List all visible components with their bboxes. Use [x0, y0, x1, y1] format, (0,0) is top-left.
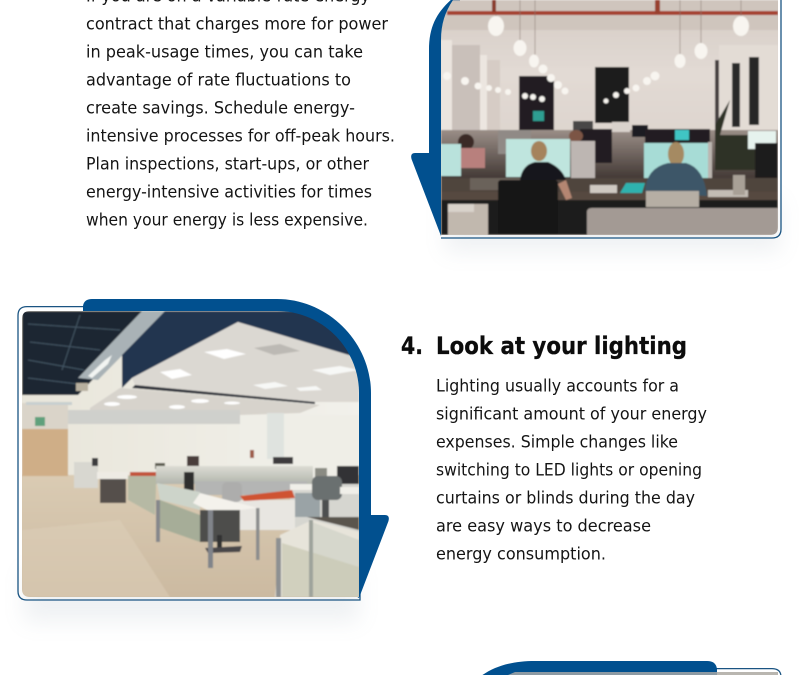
- body text: variable-rate energy contract: [86, 0, 395, 230]
- hanging bulbs: [496, 0, 741, 56]
- desk surface: [441, 176, 778, 194]
- photo: bright open office with ceiling lights and cubicles: [20, 305, 365, 600]
- photo frame outline: [441, 0, 781, 238]
- section 3: text block with office photo: [86, 0, 781, 252]
- floor: [20, 475, 365, 600]
- body text: lighting advice: energy consumption.: [436, 544, 606, 564]
- section 5: top of next photo, cut off at page bottom: [481, 661, 781, 675]
- photo sliver: [505, 672, 778, 675]
- exposed dark ceiling: [22, 311, 142, 396]
- body text: lighting advice: curtains or blinds during the day: [436, 488, 695, 508]
- body text: lighting advice: switching to LED lights or opening: [436, 460, 702, 480]
- foreground desk: [307, 517, 359, 530]
- photo shadow: [445, 200, 780, 252]
- main glass panel and desk: [157, 483, 200, 510]
- foreground partition: [587, 208, 778, 235]
- windows: [519, 76, 554, 130]
- glass partition wall: [156, 466, 313, 484]
- upper wall band: [68, 410, 240, 424]
- body text: variable-rate energy contract: advantage of rate fluctuations to: [86, 70, 351, 90]
- body text: lighting advice: expenses. Simple changes like: [436, 432, 678, 452]
- far cubicles: [74, 462, 98, 488]
- drawers: [448, 204, 488, 235]
- monitors: [441, 144, 461, 176]
- silver duct: [78, 311, 166, 380]
- body text: variable-rate energy contract: when your energy is less expensive.: [86, 210, 368, 230]
- body text: variable-rate energy contract: intensive processes for off-peak hours.: [86, 126, 395, 146]
- photo frame outline: [715, 669, 781, 675]
- wood door: [22, 428, 68, 476]
- lower ceiling tier: [90, 388, 320, 415]
- photo: open-plan office at night with pendant bulbs: [436, 0, 781, 240]
- body text: lighting advice: significant amount of your energy: [436, 404, 707, 424]
- body text: lighting advice: Lighting usually accounts for a: [436, 376, 679, 396]
- orange seat cushion: [240, 490, 295, 501]
- woman at desk: [531, 141, 547, 161]
- white ceiling panel: [132, 322, 359, 402]
- man at desk: [668, 142, 684, 166]
- blue arrow-shaped band: [481, 661, 717, 675]
- left person: [458, 134, 474, 150]
- blue arrow-shaped band: [83, 299, 389, 598]
- body text: variable-rate energy contract: in peak-usage times, you can take: [86, 42, 363, 62]
- chair back: [222, 494, 242, 502]
- red beams: [447, 11, 778, 15]
- white drawers: [227, 500, 295, 530]
- chair: [498, 178, 558, 202]
- number 4: 4.: [401, 332, 423, 360]
- body text: lighting advice: [436, 376, 707, 564]
- body text: variable-rate energy contract: create savings. Schedule energy-: [86, 98, 355, 118]
- body text: variable-rate energy contract: Plan inspections, start-ups, or other: [86, 154, 369, 174]
- heading: look at your lighting: Look at your lighting: [436, 332, 687, 360]
- body text: lighting advice: are easy ways to decrease: [436, 516, 651, 536]
- back row of desks: [441, 130, 778, 178]
- blue arrow-shaped band: [411, 0, 460, 236]
- photo shadow: [24, 570, 359, 622]
- body text: variable-rate energy contract: energy-intensive activities for times: [86, 182, 372, 202]
- section 4: lighting photo with blue arrow band: [18, 299, 707, 622]
- navy bulkhead: [122, 311, 359, 388]
- photo frame outline: [18, 307, 360, 600]
- right desks: [290, 483, 359, 532]
- body text: variable-rate energy contract: contract that charges more for power: [86, 14, 388, 34]
